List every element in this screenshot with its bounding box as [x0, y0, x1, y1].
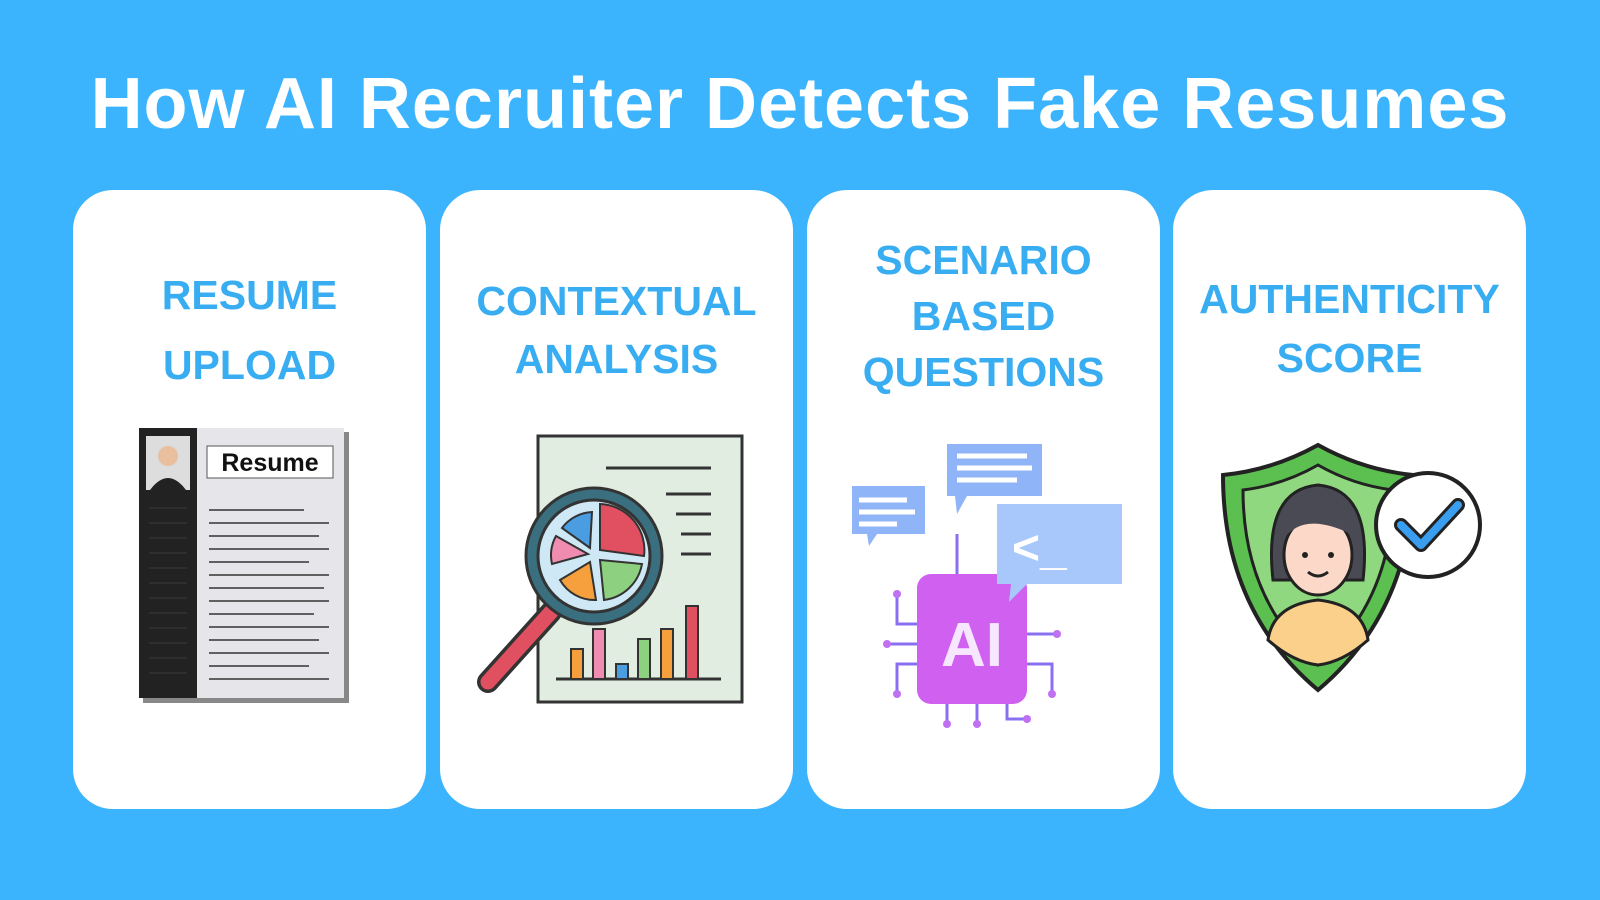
icon: magnifier over report	[477, 434, 744, 704]
heading: contextual analysis: CONTEXTUAL	[476, 278, 757, 324]
panel: authenticity score	[1173, 190, 1526, 809]
icon: AI chip with chat bubbles	[852, 444, 1122, 728]
icon: AI chip with chat bubbles: <_	[1012, 522, 1068, 575]
heading: resume upload: RESUME	[162, 272, 337, 318]
heading: authenticity score: AUTHENTICITY	[1199, 276, 1500, 322]
heading: contextual analysis	[476, 278, 757, 382]
heading: scenario based questions: SCENARIO	[875, 237, 1092, 283]
heading: authenticity score	[1199, 276, 1500, 381]
heading: scenario based questions: BASED	[912, 293, 1055, 339]
icon: resume document	[139, 428, 349, 703]
heading: contextual analysis: ANALYSIS	[515, 336, 718, 382]
panel: contextual analysis	[440, 190, 793, 809]
heading: scenario based questions	[863, 237, 1104, 395]
heading: scenario based questions: QUESTIONS	[863, 349, 1104, 395]
heading: resume upload: UPLOAD	[163, 342, 336, 388]
icon: AI chip with chat bubbles: AI	[941, 611, 1003, 680]
title: How AI Recruiter Detects Fake Resumes	[91, 64, 1509, 144]
panel: scenario based questions	[807, 190, 1160, 809]
heading: resume upload	[162, 272, 337, 388]
heading: authenticity score: SCORE	[1277, 335, 1422, 381]
panel: resume upload	[73, 190, 426, 809]
icon: resume document: Resume	[221, 449, 319, 477]
icon: shield with person and check	[1221, 442, 1482, 693]
